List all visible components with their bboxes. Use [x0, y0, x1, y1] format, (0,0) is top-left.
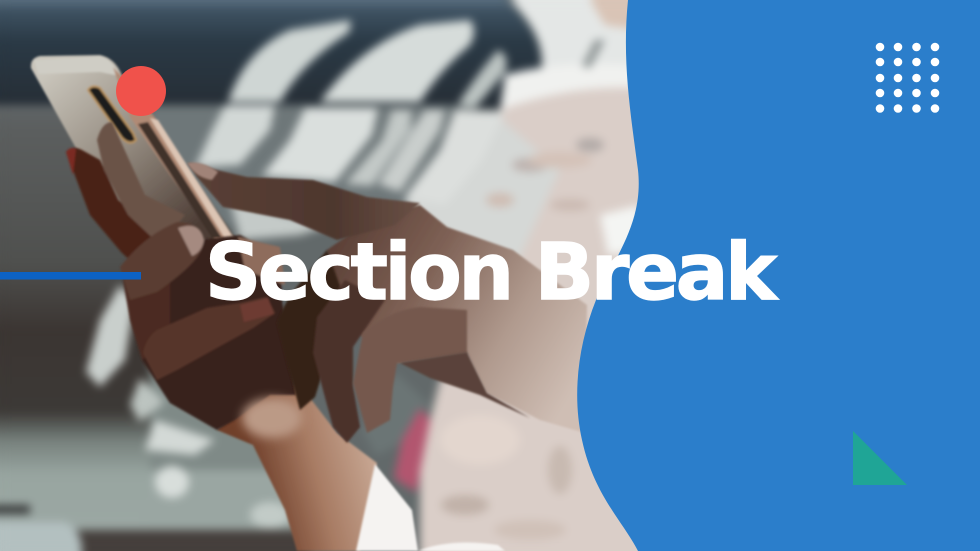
- bright upper right: [500, 0, 660, 110]
- dark shape and pink fabric strip: [362, 372, 430, 456]
- title: Section Break: [205, 228, 779, 318]
- finger three: [353, 307, 467, 433]
- top-right fabric fold: [500, 64, 637, 110]
- index fingernail: [187, 162, 218, 180]
- icon: red circle: [116, 66, 166, 116]
- white sleeve: [356, 464, 505, 551]
- window light stripes: [228, 20, 350, 102]
- icon: dot grid: [876, 43, 939, 113]
- blue organic panel: [577, 0, 980, 551]
- icon: green triangle: [853, 431, 907, 485]
- phone: [31, 55, 276, 312]
- finger one: [277, 250, 345, 410]
- accent bar: [0, 272, 141, 280]
- palm shadow: [400, 352, 530, 418]
- back of the hand: [327, 205, 587, 433]
- left hand: [66, 122, 296, 430]
- palm heel highlight: [242, 398, 302, 438]
- floral blotches: [512, 158, 548, 172]
- blurred interior backdrop: [0, 0, 660, 551]
- right hand: [187, 162, 587, 443]
- fabric: [420, 75, 660, 551]
- finger two: [313, 280, 385, 443]
- ground highlights: [155, 466, 189, 498]
- background photo: hands holding a phone: [0, 0, 660, 551]
- forearm and wrist: [217, 385, 377, 551]
- index finger: [188, 163, 420, 240]
